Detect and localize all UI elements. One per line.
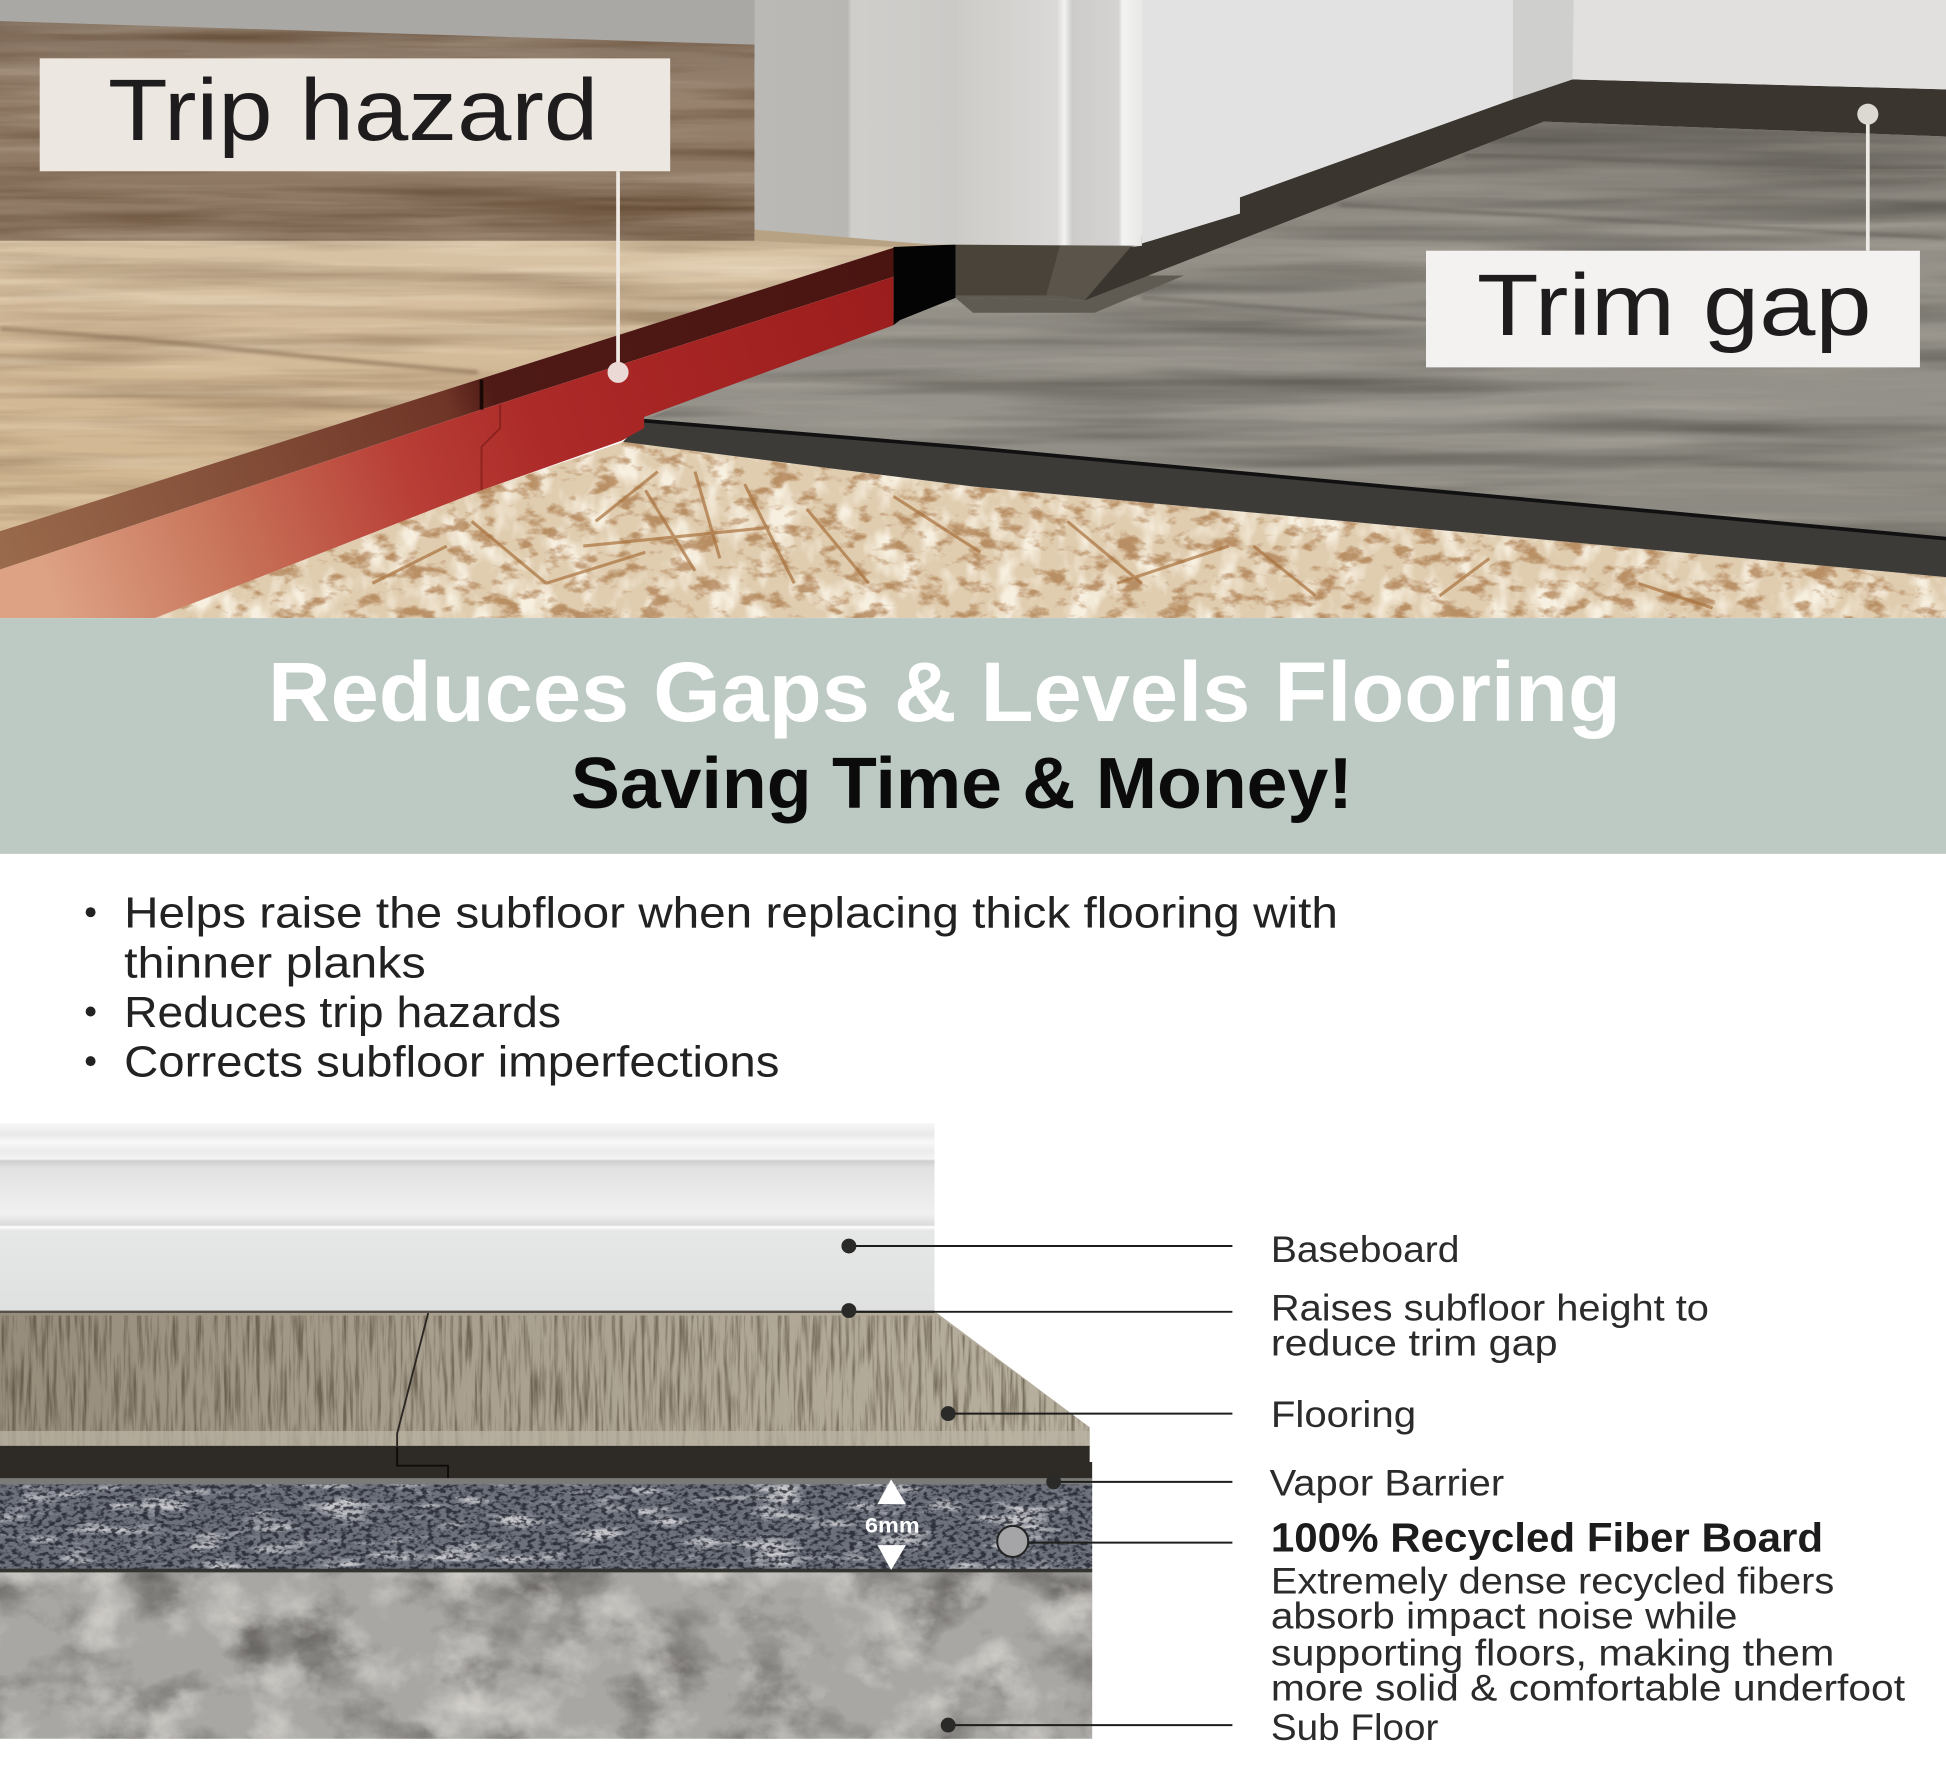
casing foot plinth xyxy=(1046,246,1131,300)
dark underlayment edge under grey plank xyxy=(623,419,1946,577)
light wood flooring xyxy=(0,236,906,534)
black strip end xyxy=(894,244,956,325)
diagram labels: reduce trim gap xyxy=(1271,1321,1558,1363)
floor patch under casing xyxy=(755,223,956,254)
diagram labels: Flooring xyxy=(1271,1393,1416,1435)
floor shadow under casing xyxy=(956,276,1184,313)
diagram labels: Extremely dense recycled fibers xyxy=(1271,1560,1834,1602)
white wall panel xyxy=(1131,0,1513,247)
callout: trim gap: Trim gap xyxy=(1477,257,1872,354)
subheading: Saving Time & Money! xyxy=(571,744,1353,824)
plank joint profile xyxy=(397,1447,448,1478)
grey flooring plank xyxy=(633,118,1946,540)
benefits bullet list: Reduces trip hazards xyxy=(124,989,561,1037)
diagram labels: Raises subfloor height to xyxy=(1271,1287,1709,1329)
diagram labels: Baseboard xyxy=(1271,1228,1459,1270)
benefits bullet list: thinner planks xyxy=(124,939,426,987)
cross-section diagram xyxy=(0,1123,1232,1739)
diagram labels xyxy=(1270,1228,1906,1748)
dark baseboard trim xyxy=(1055,79,1946,300)
diagram labels: Sub Floor xyxy=(1271,1706,1438,1748)
diagram labels: absorb impact noise while xyxy=(1271,1594,1738,1636)
6mm thickness marker: 6mm xyxy=(865,1515,920,1538)
diagram labels: more solid & comfortable underfoot xyxy=(1271,1666,1906,1708)
corner wall xyxy=(1513,0,1946,99)
panel: installation photo scene xyxy=(0,0,1946,618)
raised strip: dark top side xyxy=(0,247,896,570)
raised strip: red front side xyxy=(0,277,894,618)
diagram labels: 100% Recycled Fiber Board xyxy=(1271,1514,1823,1560)
diagram labels: supporting floors, making them xyxy=(1271,1632,1834,1674)
layer: flooring top xyxy=(0,1312,1092,1447)
layer: baseboard xyxy=(0,1123,935,1312)
callout: trip hazard: Trip hazard xyxy=(108,62,598,159)
heading: Reduces Gaps & Levels Flooring xyxy=(268,645,1621,739)
callout: trip hazard xyxy=(40,58,670,383)
layer: vapor barrier xyxy=(0,1478,1092,1486)
callout: trim gap xyxy=(1426,104,1920,367)
diagram labels: Vapor Barrier xyxy=(1270,1461,1504,1503)
back wall xyxy=(0,0,769,62)
brown wood baseboard xyxy=(0,21,754,241)
benefits bullet list: Corrects subfloor imperfections xyxy=(124,1039,779,1087)
OSB subfloor xyxy=(149,434,1946,618)
leader lines xyxy=(841,1239,1232,1733)
door casing xyxy=(755,0,1142,246)
6mm thickness marker xyxy=(865,1479,920,1570)
layer: concrete sub floor xyxy=(0,1572,1092,1739)
floor shadow base under casing xyxy=(956,236,1154,316)
layer: recycled fiber board xyxy=(0,1484,1092,1572)
headline band xyxy=(0,618,1946,854)
benefits bullet list xyxy=(86,890,1338,1087)
dark casing foot xyxy=(956,244,1060,295)
strip seams xyxy=(482,380,500,490)
layer: dark plank core xyxy=(0,1446,1092,1479)
benefits bullet list: Helps raise the subfloor when replacing thick flooring with xyxy=(124,890,1338,938)
